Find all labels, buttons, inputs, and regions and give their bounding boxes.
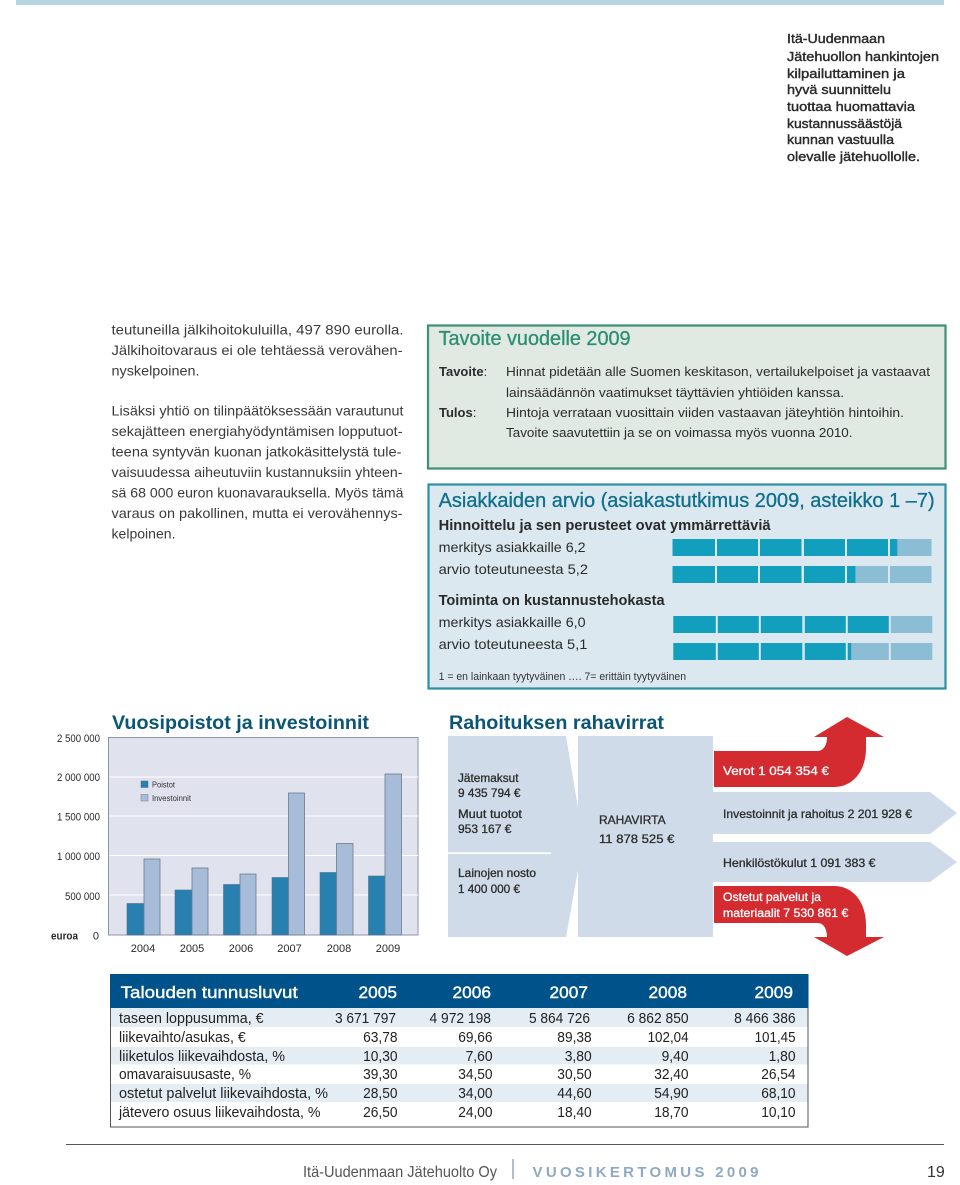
table header [110, 974, 808, 1008]
arrow: Verot [714, 717, 884, 787]
row: jätevero osuus liikevaihdosta: 24,00 [458, 1105, 493, 1121]
income block: Muut tuotot [458, 807, 523, 821]
table header: 2005 [358, 983, 397, 1002]
axis labels: 2 000 000 [57, 772, 100, 784]
body text column: Jälkihoitovaraus ei ole tehtäessä verovähen- [112, 342, 403, 358]
axis labels: 1 500 000 [57, 812, 100, 824]
footer [303, 1159, 945, 1181]
axis labels: 0 [93, 930, 99, 942]
arrow: Investoinnit ja rahoitus [713, 792, 957, 834]
body text column: kelpoinen. [112, 526, 176, 542]
row: jätevero osuus liikevaihdosta: 18,70 [654, 1105, 689, 1121]
bar chart: depreciation and investments [51, 733, 418, 955]
pull quote: kunnan vastuulla [787, 132, 895, 147]
row: omavaraisuusaste: 26,54 [761, 1067, 796, 1083]
row: liikevaihto/asukas: 102,04 [648, 1030, 689, 1046]
row: taseen loppusumma [119, 1011, 796, 1027]
scale note: 1 = en lainkaan tyytyväinen …. 7= erittäin tyytyväinen [439, 671, 686, 683]
table header: 2006 [452, 983, 491, 1002]
row: liikevaihto/asukas: 69,66 [458, 1030, 493, 1046]
legend: Poistot [152, 780, 176, 790]
row: taseen loppusumma: 6 862 850 [627, 1011, 689, 1027]
row: omavaraisuusaste: 34,50 [458, 1067, 493, 1083]
rating bar: arvio 5,1 [673, 643, 932, 660]
axis labels: 500 000 [65, 891, 100, 903]
row: liikevaihto/asukas: 101,45 [755, 1030, 796, 1046]
pull quote: hyvä suunnittelu [787, 82, 891, 97]
axis labels: 1 000 000 [57, 851, 100, 863]
text: goal and result [439, 364, 930, 440]
row: jätevero osuus liikevaihdosta: 18,40 [557, 1105, 592, 1121]
row: omavaraisuusaste: 39,30 [363, 1067, 398, 1083]
year labels: 2004 [131, 943, 155, 955]
arrow: Henkilöstökulut: Henkilöstökulut 1 091 383 € [723, 856, 876, 870]
arrow: Henkilöstökulut [713, 842, 957, 882]
arrow: Ostetut palvelut ja materiaalit: Ostetut palvelut ja [723, 890, 821, 904]
body text column: teena syntyvän kuonan jatkokäsittelystä tule- [112, 444, 402, 460]
heading: Rahoituksen rahavirrat: Rahoituksen rahavirrat [449, 712, 665, 734]
income block [448, 736, 578, 937]
row: omavaraisuusaste [119, 1067, 796, 1083]
body text column: sekajätteen energiahyödyntämisen lopputuot- [112, 423, 403, 439]
row: liiketulos liikevaihdosta [119, 1049, 796, 1065]
rating bar: merkitys 6,0 [673, 616, 932, 633]
central block: Rahavirta [578, 736, 713, 937]
row: taseen loppusumma: 8 466 386 [734, 1011, 796, 1027]
row: ostetut palvelut liikevaihdosta: 54,90 [654, 1086, 689, 1102]
row: ostetut palvelut liikevaihdosta: 68,10 [761, 1086, 796, 1102]
label: arvio 5,1: arvio toteutuneesta 5,1 [439, 636, 588, 652]
heading: Tavoite vuodelle 2009: Tavoite vuodelle 2009 [439, 328, 631, 350]
pull quote: Itä-Uudenmaan [787, 31, 885, 46]
row: taseen loppusumma: 4 972 198 [430, 1011, 491, 1027]
year labels: 2008 [327, 943, 351, 955]
table header: 2007 [550, 983, 588, 1002]
row: liiketulos liikevaihdosta: 9,40 [662, 1049, 689, 1065]
pull quote: tuottaa huomattavia [787, 99, 916, 114]
income block: Lainojen nosto [458, 866, 536, 880]
text: goal and result: Hintoja verrataan vuosittain viiden vastaavan jäteyhtiön hintoihin. [506, 405, 904, 420]
axis labels: 2 500 000 [57, 733, 100, 745]
pull quote: kustannussäästöjä [787, 116, 903, 131]
text: goal and result: lainsäädännön vaatimukset täyttävien yhtiöiden kanssa. [506, 385, 844, 400]
row: jätevero osuus liikevaihdosta [118, 1105, 796, 1121]
row: omavaraisuusaste: omavaraisuusaste, % [119, 1067, 251, 1083]
panel: Tavoite vuodelle 2009 [428, 326, 946, 468]
footer: VUOSIKERTOMUS 2009 [532, 1164, 758, 1181]
pull quote: Jätehuollon hankintojen [787, 49, 939, 64]
year labels: 2005 [180, 943, 204, 955]
bars: Poistot [127, 872, 385, 935]
row: taseen loppusumma: taseen loppusumma, € [119, 1011, 264, 1027]
row: taseen loppusumma: 5 864 726 [529, 1011, 590, 1027]
pull quote: kilpailuttaminen ja [787, 66, 906, 81]
row: liiketulos liikevaihdosta: liiketulos liikevaihdosta, % [119, 1049, 285, 1065]
row: liikevaihto/asukas: 63,78 [363, 1030, 398, 1046]
rating bar: merkitys 6,2 [672, 539, 932, 556]
footer: Itä-Uudenmaan Jätehuolto Oy [303, 1164, 497, 1181]
panel: Asiakkaiden arvio [428, 484, 946, 688]
income block: 953 167 € [458, 822, 512, 836]
body text column: sä 68 000 euron kuonavarauksella. Myös tämä [112, 484, 404, 500]
row: liiketulos liikevaihdosta: 10,30 [363, 1049, 398, 1065]
income block: 1 400 000 € [458, 882, 520, 896]
text: goal and result: Hinnat pidetään alle Suomen keskitason, vertailukelpoiset ja vastaavat [506, 364, 930, 379]
footer: 19 [927, 1164, 945, 1181]
body text column: nyskelpoinen. [112, 362, 200, 378]
row: taseen loppusumma: 3 671 797 [335, 1011, 396, 1027]
legend [141, 780, 192, 803]
year labels: 2007 [277, 943, 302, 955]
row: ostetut palvelut liikevaihdosta: 34,00 [458, 1086, 493, 1102]
top accent bar [16, 0, 944, 5]
row: ostetut palvelut liikevaihdosta: 44,60 [557, 1086, 592, 1102]
subheading: Toiminta: Toiminta on kustannustehokasta [439, 593, 666, 609]
bars: Investoinnit [144, 774, 402, 935]
table: Talouden tunnusluvut [110, 974, 808, 1127]
table header: 2008 [648, 983, 687, 1002]
row: liikevaihto/asukas: liikevaihto/asukas, € [119, 1030, 246, 1046]
body text column: teutuneilla jälkihoitokuluilla, 497 890 eurolla. [112, 322, 404, 338]
row: liikevaihto/asukas: 89,38 [557, 1030, 592, 1046]
heading: Asiakkaiden arvio: Asiakkaiden arvio (asiakastutkimus 2009, asteikko 1 –7) [439, 490, 935, 512]
label: merkitys 6,2: merkitys asiakkaille 6,2 [439, 539, 586, 555]
row: liiketulos liikevaihdosta: 7,60 [466, 1049, 493, 1065]
rating bar: arvio 5,2 [672, 566, 932, 583]
arrow: Investoinnit ja rahoitus: Investoinnit ja rahoitus 2 201 928 € [723, 807, 912, 821]
label: merkitys 6,0: merkitys asiakkaille 6,0 [439, 614, 586, 630]
row: omavaraisuusaste: 30,50 [557, 1067, 592, 1083]
body text column: varaus on pakollinen, mutta ei verovähennys- [112, 505, 403, 521]
axis labels: euroa [51, 930, 79, 942]
row: ostetut palvelut liikevaihdosta: 28,50 [363, 1086, 398, 1102]
text: goal and result: Tavoite saavutettiin ja se on voimassa myös vuonna 2010. [506, 425, 852, 440]
pull quote [787, 31, 939, 164]
arrow: Ostetut palvelut ja materiaalit [714, 886, 884, 956]
body text column: Lisäksi yhtiö on tilinpäätöksessään varautunut [112, 402, 404, 418]
flow diagram: cash flows [448, 717, 957, 956]
pull quote: olevalle jätehuollolle. [787, 149, 920, 164]
text: goal and result: Tavoite: [439, 364, 487, 379]
arrow: Verot: Verot 1 054 354 € [723, 764, 829, 778]
year labels: 2006 [229, 943, 253, 955]
income block: Jätemaksut [458, 771, 519, 785]
row: jätevero osuus liikevaihdosta: 10,10 [761, 1105, 796, 1121]
row: liiketulos liikevaihdosta: 1,80 [769, 1049, 796, 1065]
row: liiketulos liikevaihdosta: 3,80 [565, 1049, 592, 1065]
row: jätevero osuus liikevaihdosta: jätevero osuus liikevaihdosta, % [118, 1105, 321, 1121]
subheading: Hinnoittelu: Hinnoittelu ja sen perusteet ovat ymmärrettäviä [439, 518, 772, 534]
row: ostetut palvelut liikevaihdosta: ostetut palvelut liikevaihdosta, % [119, 1086, 328, 1102]
text: goal and result: Tulos: [439, 405, 476, 420]
body text column [112, 322, 404, 542]
central block: Rahavirta: RAHAVIRTA [599, 813, 666, 827]
income block: 9 435 794 € [458, 786, 521, 800]
row: omavaraisuusaste: 32,40 [654, 1067, 689, 1083]
row: liikevaihto/asukas [119, 1030, 796, 1046]
label: arvio 5,2: arvio toteutuneesta 5,2 [439, 561, 588, 577]
axis labels [51, 733, 100, 942]
row: jätevero osuus liikevaihdosta: 26,50 [363, 1105, 398, 1121]
legend: Investoinnit [152, 793, 192, 803]
table header: 2009 [754, 983, 793, 1002]
arrow: Ostetut palvelut ja materiaalit: materiaalit 7 530 861 € [723, 906, 849, 920]
heading: Vuosipoistot ja investoinnit: Vuosipoistot ja investoinnit [112, 712, 370, 734]
central block: Rahavirta: 11 878 525 € [599, 832, 675, 846]
year labels: 2009 [376, 943, 400, 955]
table header: Talouden tunnusluvut [121, 983, 298, 1002]
row: ostetut palvelut liikevaihdosta [119, 1086, 796, 1102]
year labels [131, 943, 400, 955]
body text column: vaisuudessa aiheutuviin kustannuksiin yhteen- [112, 464, 403, 480]
